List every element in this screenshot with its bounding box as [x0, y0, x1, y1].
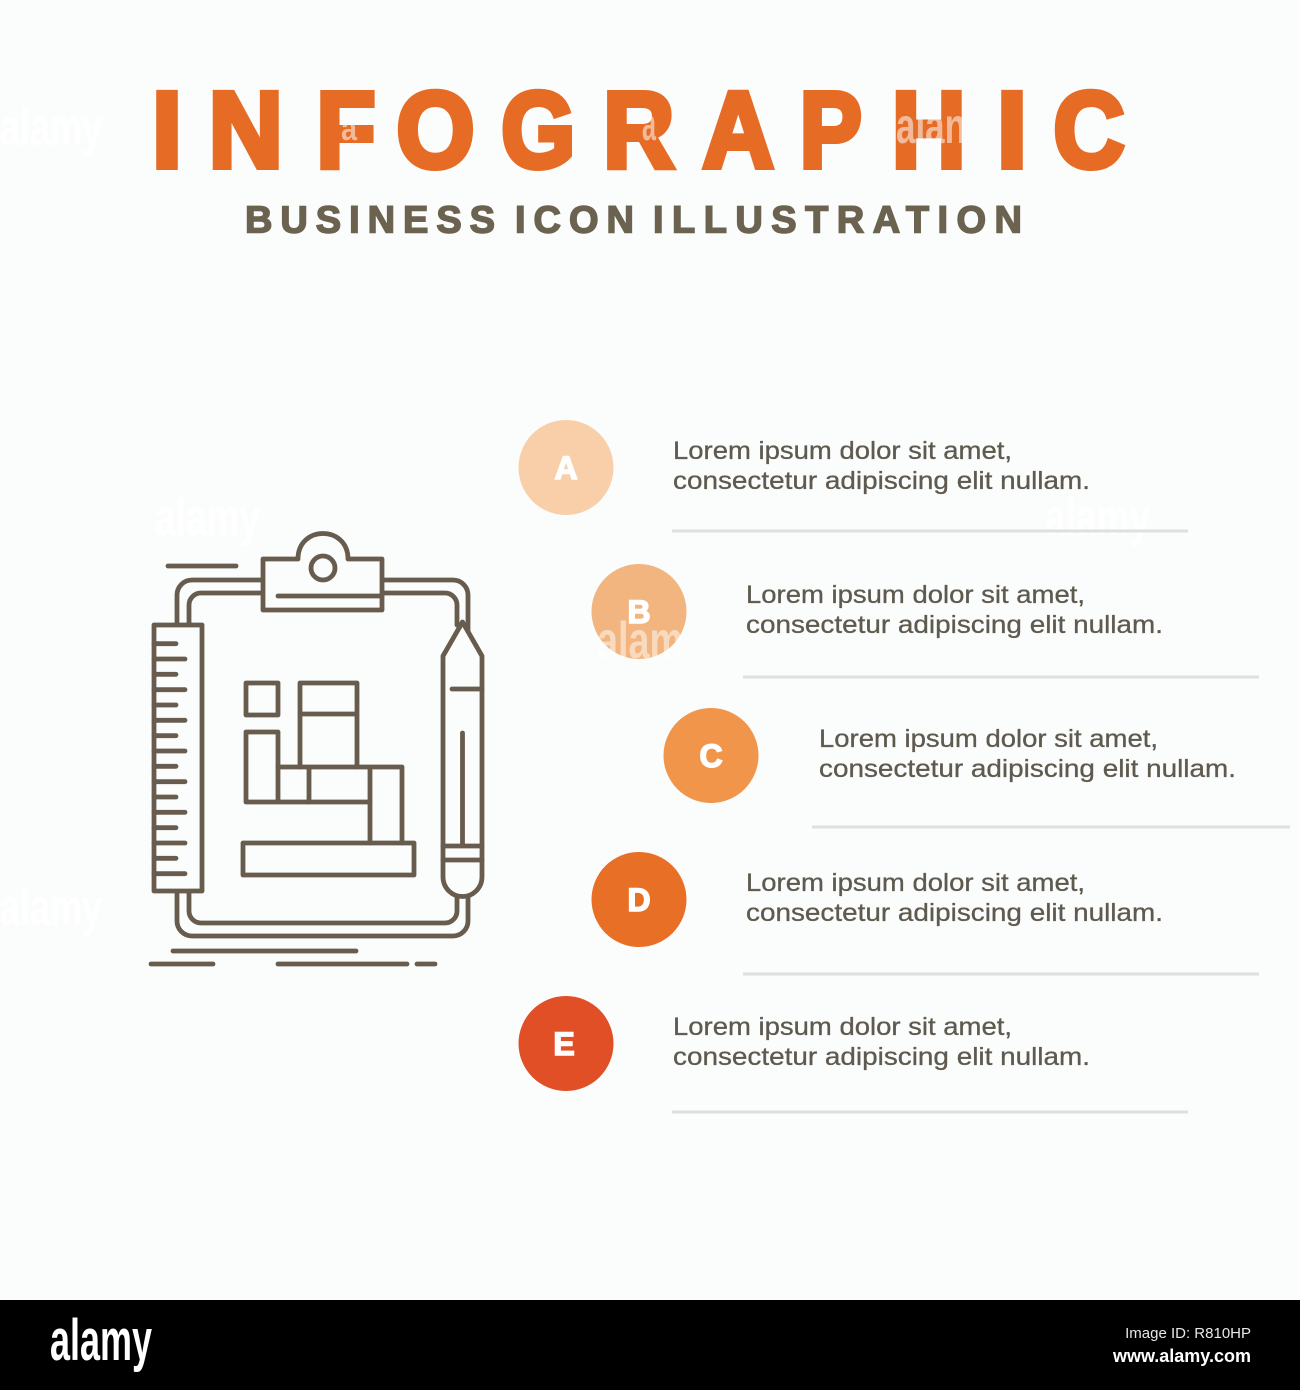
chart blocks: [243, 683, 414, 875]
item B: [592, 564, 1259, 678]
background watermarks: alamy: [1045, 489, 1150, 547]
badge C: C: [699, 738, 723, 774]
title: [152, 69, 1124, 190]
background watermarks: alamy: [155, 489, 260, 547]
title: I: [997, 69, 1027, 190]
title watermark fragments: a: [341, 110, 358, 148]
subtitle: ILLUSTRATION: [653, 199, 1022, 241]
text A: [673, 437, 1090, 495]
text E: Lorem ipsum dolor sit amet,: [673, 1013, 1012, 1041]
text B: [746, 581, 1163, 639]
subtitle: [245, 199, 1022, 241]
title: N: [209, 69, 283, 190]
badge A: A: [554, 450, 578, 486]
badge B: [592, 564, 686, 670]
title: C: [1054, 69, 1124, 190]
title: F: [316, 69, 376, 190]
text C: Lorem ipsum dolor sit amet,: [819, 725, 1158, 753]
pencil: [443, 622, 482, 897]
title: I: [152, 69, 182, 190]
text E: consectetur adipiscing elit nullam.: [673, 1043, 1090, 1071]
item C: [664, 708, 1290, 828]
subtitle: ICON: [515, 199, 634, 241]
title: A: [703, 69, 774, 190]
badge C: [664, 708, 758, 803]
text A: consectetur adipiscing elit nullam.: [673, 467, 1090, 495]
badge D: D: [627, 882, 651, 918]
title: H: [892, 69, 966, 190]
title watermark fragments: alan: [896, 98, 966, 154]
ruler: [154, 625, 202, 891]
item A: [518, 420, 1188, 532]
title watermark fragments: a: [642, 98, 656, 150]
subtitle: BUSINESS: [245, 199, 495, 241]
title: G: [501, 69, 575, 190]
background watermarks: alamy: [0, 99, 102, 157]
badge A: [518, 420, 614, 515]
title: P: [800, 69, 862, 190]
item D: [592, 852, 1259, 976]
item E: [518, 996, 1188, 1114]
text B: Lorem ipsum dolor sit amet,: [746, 581, 1085, 609]
badge E: E: [553, 1026, 575, 1062]
text B: consectetur adipiscing elit nullam.: [746, 611, 1163, 639]
text C: [819, 725, 1236, 783]
sketch line above clipboard: [168, 564, 236, 568]
image id: Image ID: R810HP: [1125, 1325, 1251, 1342]
text D: [746, 869, 1163, 927]
clipboard board outline: [177, 580, 468, 936]
text C: consectetur adipiscing elit nullam.: [819, 755, 1236, 783]
badge D: [592, 852, 686, 947]
background watermarks: alamy: [0, 879, 102, 937]
text E: [673, 1013, 1090, 1071]
badge B: B: [627, 594, 651, 630]
title: R: [603, 69, 674, 190]
background watermarks: [0, 99, 1150, 937]
title watermark fragments: [341, 98, 966, 154]
badge E: [518, 996, 614, 1091]
footer bar: [0, 1300, 1300, 1390]
clipboard clip: [263, 534, 382, 610]
sketch lines below clipboard: [151, 951, 435, 964]
title: O: [396, 69, 474, 190]
text D: Lorem ipsum dolor sit amet,: [746, 869, 1085, 897]
footer logo: alamy: [50, 1308, 152, 1373]
icon: clipboard with ruler, pencil and blocks: [151, 534, 482, 964]
website: www.alamy.com: [1112, 1346, 1251, 1366]
text A: Lorem ipsum dolor sit amet,: [673, 437, 1012, 465]
text D: consectetur adipiscing elit nullam.: [746, 899, 1163, 927]
badge B: alam: [597, 612, 683, 670]
